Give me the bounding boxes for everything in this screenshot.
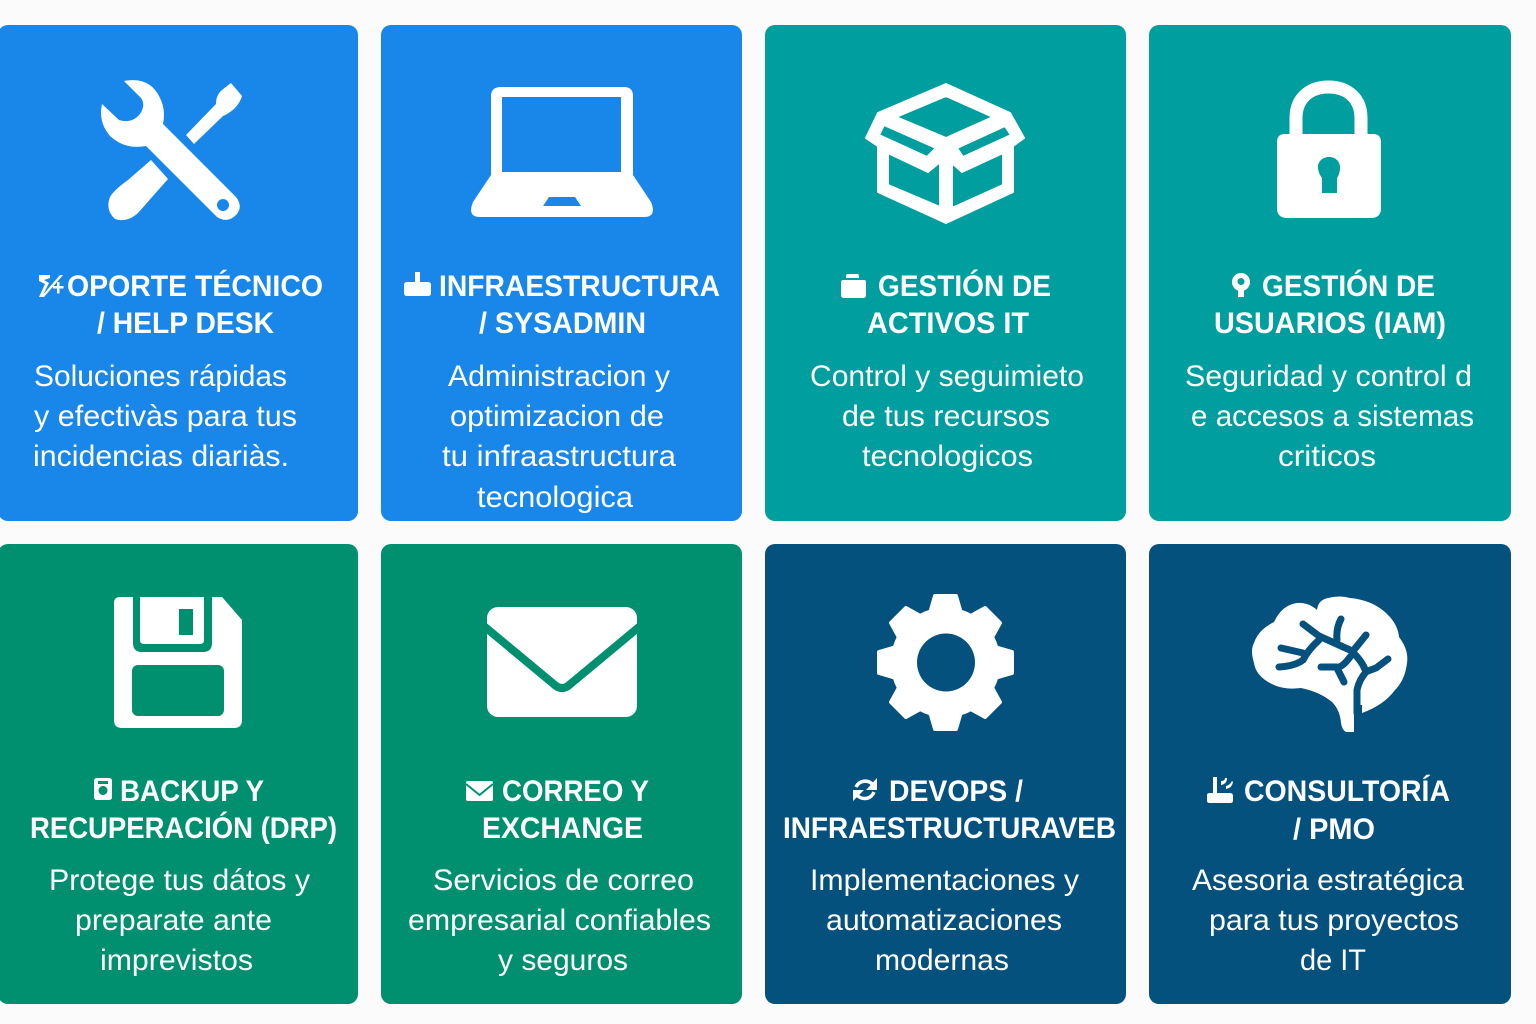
- icon: laptop: [471, 87, 653, 217]
- icon: wrench and screwdriver: [101, 80, 242, 220]
- title: INFRAESTRUCTURA: [439, 270, 720, 303]
- card background: [1149, 25, 1511, 521]
- description: modernas: [875, 944, 1009, 977]
- icon: floppy disk: [114, 597, 242, 728]
- description: empresarial confiables: [408, 904, 711, 937]
- title: EXCHANGE: [482, 812, 643, 845]
- title: DEVOPS /: [889, 775, 1024, 808]
- description: y efectivàs para tus: [34, 400, 297, 433]
- card background: [0, 25, 358, 521]
- icon: backup glyph: [94, 778, 112, 800]
- description: [1185, 360, 1474, 473]
- description: [442, 360, 676, 514]
- title: RECUPERACIÓN (DRP): [30, 811, 337, 845]
- title: INFRAESTRUCTURAVEB: [783, 812, 1116, 845]
- panel: gestión de activos: [765, 25, 1126, 521]
- description: de tus recursos: [842, 400, 1050, 433]
- icon: envelope glyph: [466, 781, 493, 801]
- card background: [381, 25, 742, 521]
- title: [841, 269, 1051, 340]
- icon: glyph: [404, 272, 431, 296]
- title: GESTIÓN DE: [1262, 269, 1435, 303]
- icon: padlock: [1277, 87, 1381, 218]
- description: [1192, 864, 1464, 977]
- icon: tools glyph: [39, 275, 64, 297]
- panel: consultoría: [1149, 544, 1511, 1004]
- description: Administracion y: [448, 360, 670, 393]
- description: tecnologicos: [862, 440, 1033, 473]
- icon: refresh glyph: [856, 781, 874, 799]
- card background: [1149, 544, 1511, 1004]
- panel: gestión de usuarios: [1149, 25, 1511, 521]
- title: CONSULTORÍA: [1244, 774, 1450, 808]
- title: GESTIÓN DE: [878, 269, 1051, 303]
- description: [33, 360, 297, 473]
- description: preparate ante: [75, 904, 272, 937]
- title: / PMO: [1293, 813, 1375, 846]
- description: para tus proyectos: [1209, 904, 1459, 937]
- card background: [0, 544, 358, 1004]
- title: / HELP DESK: [97, 307, 274, 340]
- description: Asesoria estratégica: [1192, 864, 1464, 897]
- description: optimizacion de: [450, 400, 664, 433]
- description: de IT: [1300, 944, 1366, 977]
- icon: envelope: [485, 607, 639, 717]
- panel: soporte técnico: [0, 25, 358, 521]
- description: incidencias diariàs.: [33, 440, 289, 473]
- icon: gear: [879, 596, 1012, 729]
- description: [408, 864, 711, 977]
- title: [30, 775, 337, 845]
- title: BACKUP Y: [120, 775, 264, 808]
- description: [49, 864, 310, 977]
- description: y seguros: [498, 944, 628, 977]
- title: USUARIOS (IAM): [1214, 307, 1446, 340]
- description: Control y seguimieto: [810, 360, 1084, 393]
- description: criticos: [1278, 440, 1376, 473]
- title: [466, 775, 649, 845]
- panel: correo: [381, 544, 742, 1004]
- panel: infraestructura: [381, 25, 742, 521]
- title: ACTIVOS IT: [867, 307, 1029, 340]
- card background: [381, 544, 742, 1004]
- title: [783, 775, 1116, 845]
- title: [1207, 774, 1450, 846]
- icon: open box: [866, 84, 1024, 223]
- title: OPORTE TÉCNICO: [67, 269, 323, 303]
- card background: [765, 25, 1126, 521]
- title: [1214, 269, 1446, 340]
- description: imprevistos: [100, 944, 253, 977]
- title: CORREO Y: [502, 775, 649, 808]
- description: Servicios de correo: [433, 864, 694, 897]
- description: [810, 864, 1079, 977]
- title: [39, 269, 323, 340]
- title: / SYSADMIN: [479, 307, 646, 340]
- icon: brain: [1252, 596, 1407, 734]
- description: Implementaciones y: [810, 864, 1079, 897]
- panel: devops: [765, 544, 1126, 1004]
- description: Seguridad y control d: [1185, 360, 1472, 393]
- card background: [765, 544, 1126, 1004]
- icon: key glyph: [1232, 273, 1250, 297]
- description: e accesos a sistemas: [1191, 400, 1474, 433]
- icon: briefcase glyph: [841, 274, 866, 298]
- description: tecnologica: [477, 481, 633, 514]
- panel: backup: [0, 544, 358, 1004]
- description: automatizaciones: [826, 904, 1062, 937]
- description: Soluciones rápidas: [34, 360, 287, 393]
- description: tu infraastructura: [442, 440, 676, 473]
- icon: consulting glyph: [1207, 777, 1233, 803]
- description: Protege tus dátos y: [49, 864, 310, 897]
- title: [404, 270, 720, 340]
- description: [810, 360, 1084, 473]
